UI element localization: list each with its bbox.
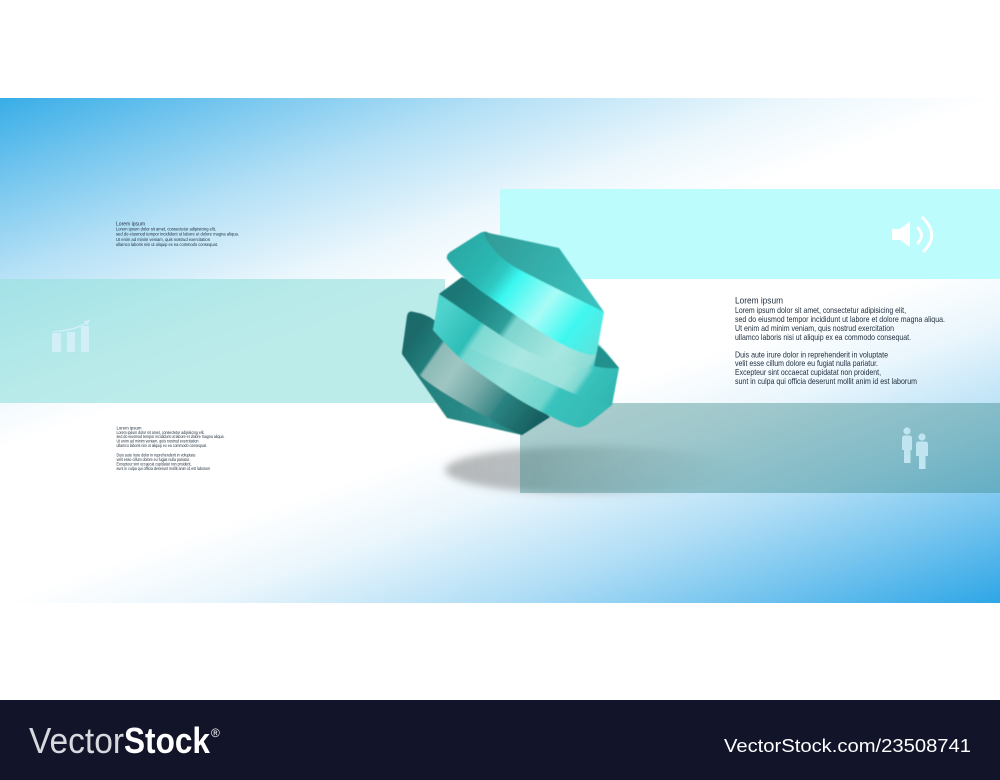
footer logo: Vector xyxy=(29,720,124,761)
background panel xyxy=(0,98,1000,603)
footer logo: Stock xyxy=(124,720,211,761)
sphere: top slice xyxy=(447,232,604,355)
text block: bottom left: Duis aute irure dolor in reprehenderit in voluptate xyxy=(116,452,196,458)
sphere: bottom slice xyxy=(402,312,550,435)
text block: right: sunt in culpa qui officia deserunt mollit anim id est laborum xyxy=(735,376,917,386)
footer logo xyxy=(29,720,220,761)
text block: bottom left: Excepteur sint occaecat cupidatat non proident, xyxy=(116,461,192,466)
text block: bottom left: ullamco laboris nisi ut aliquip ex ea commodo consequat. xyxy=(116,443,207,448)
text block: top left: Lorem ipsum xyxy=(116,222,145,228)
text block: bottom left: velit esse cillum dolore eu fugiat nulla pariatur. xyxy=(116,457,190,462)
sphere: middle slice lower strip xyxy=(433,326,612,427)
text block: bottom left xyxy=(116,426,224,471)
text block: right xyxy=(735,296,945,386)
icon: bar chart xyxy=(52,320,90,352)
text block: top left: Ut enim ad minim veniam, quis nostrud exercitation xyxy=(116,237,210,243)
sphere: middle slice right tip xyxy=(594,345,619,368)
footer bar xyxy=(0,700,1000,780)
text block: bottom left: sunt in culpa qui officia deserunt mollit anim id est laborum xyxy=(116,466,211,471)
text block: right: Excepteur sint occaecat cupidatat non proident, xyxy=(735,367,881,377)
text block: bottom left: Ut enim ad minim veniam, quis nostrud exercitation xyxy=(116,438,199,443)
text block: top left: Lorem ipsum dolor sit amet, consectetur adipisicing elit, xyxy=(116,226,216,232)
text block: right: sed do eiusmod tempor incididunt ut labore et dolore magna aliqua. xyxy=(735,314,945,324)
sphere shadow xyxy=(445,446,745,494)
icon: speaker xyxy=(892,217,932,252)
text block: top left xyxy=(116,222,239,248)
text block: right: ullamco laboris nisi ut aliquip ex ea commodo consequat. xyxy=(735,332,911,342)
sliced sphere xyxy=(402,232,619,435)
footer logo: ® xyxy=(211,726,220,740)
sphere: middle slice top surface xyxy=(439,277,619,369)
text block: bottom left: sed do eiusmod tempor incididunt ut labore et dolore magna aliqua. xyxy=(116,434,224,439)
panel: middle left band xyxy=(0,279,445,403)
panel: bottom right band xyxy=(520,403,1000,493)
footer id: VectorStock.com/23508741 xyxy=(724,736,971,756)
text block: right: Ut enim ad minim veniam, quis nostrud exercitation xyxy=(735,323,894,333)
sphere: middle slice xyxy=(433,277,619,427)
text block: right: Duis aute irure dolor in reprehenderit in voluptate xyxy=(735,350,888,360)
text block: top left: sed do eiusmod tempor incididunt ut labore et dolore magna aliqua. xyxy=(116,232,239,238)
text block: right: Lorem ipsum xyxy=(735,296,783,306)
text block: top left: ullamco laboris nisi ut aliquip ex ea commodo consequat. xyxy=(116,242,218,248)
panel: top right band xyxy=(500,189,1000,279)
text block: right: velit esse cillum dolore eu fugiat nulla pariatur. xyxy=(735,358,878,368)
icon: people xyxy=(902,427,928,469)
text block: right: Lorem ipsum dolor sit amet, consectetur adipisicing elit, xyxy=(735,305,906,315)
text block: bottom left: Lorem ipsum xyxy=(116,426,142,432)
text block: bottom left: Lorem ipsum dolor sit amet, consectetur adipisicing elit, xyxy=(116,430,204,435)
